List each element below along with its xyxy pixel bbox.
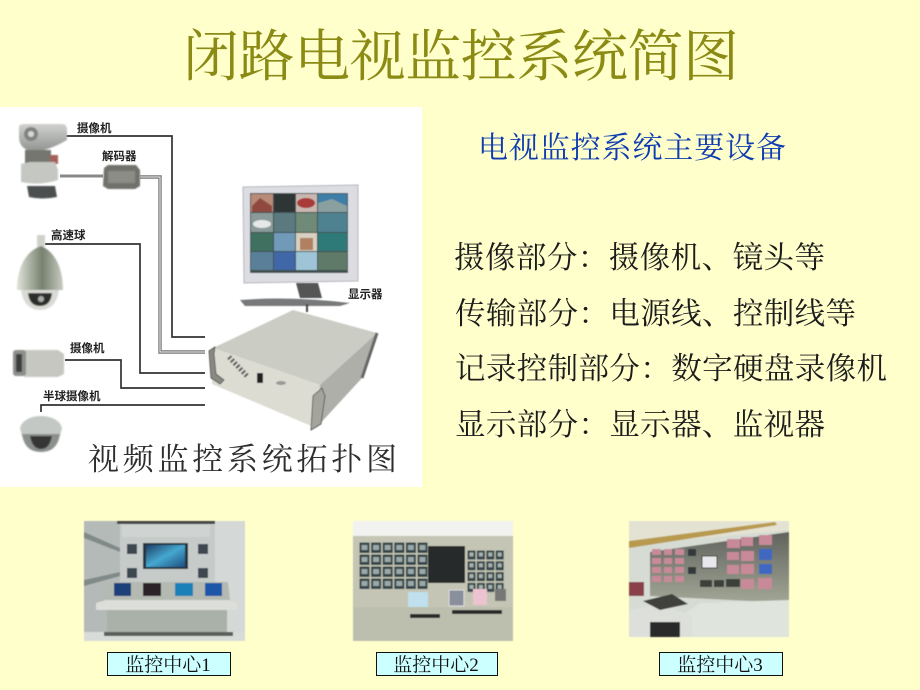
diagram labels: 摄像机 [77,121,112,135]
diagram labels: 解码器 [102,149,137,163]
equipment list: 传输部分：电源线、控制线等 [455,297,856,331]
label: monitoring center 2 [376,652,498,676]
diagram labels: 半球摄像机 [43,389,101,403]
icon: digital video recorder [209,310,377,430]
diagram labels: 高速球 [51,228,86,242]
icon: speed dome camera [17,235,63,310]
icon: decoder [103,165,140,189]
wiring lines [41,136,205,412]
equipment list [454,241,887,442]
icon: mini dome camera [20,416,62,452]
diagram labels [43,121,383,403]
diagram labels: 摄像机 [70,341,105,355]
panel: system topology diagram [0,107,422,487]
title: 闭路电视监控系统简图 [183,27,739,89]
label: monitoring center 3: 监控中心3 [677,654,763,676]
icon: monitor [240,185,358,312]
icon: PTZ camera [19,124,67,198]
equipment list: 记录控制部分：数字硬盘录像机 [455,352,887,386]
photo: monitoring center 2 [353,521,513,641]
photo: monitoring center 1 [84,521,245,641]
equipment list: 显示部分：显示器、监视器 [455,408,825,442]
label: monitoring center 1: 监控中心1 [125,654,211,676]
equipment list: 摄像部分：摄像机、镜头等 [454,241,825,275]
photo: monitoring center 3 [629,521,789,637]
diagram labels: 显示器 [348,288,383,301]
label: monitoring center 2: 监控中心2 [393,654,479,676]
diagram caption: 视频监控系统拓扑图 [88,442,397,477]
label: monitoring center 1 [108,652,230,676]
heading: main equipment: 电视监控系统主要设备 [478,132,786,165]
label: monitoring center 3 [660,652,782,676]
icon: box camera [13,350,64,377]
